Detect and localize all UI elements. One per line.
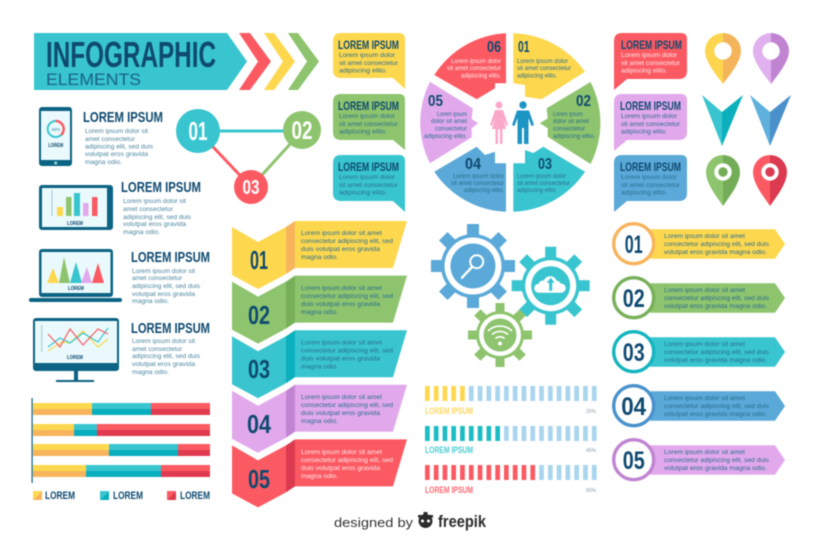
progress bar: red 65%: LOREM IPSUM — [425, 485, 473, 495]
speech bubble: blue — [614, 155, 687, 212]
ribbon step 04: duis volutpat eros gravida — [301, 411, 381, 417]
wheel segment 02: consectetur — [553, 126, 585, 132]
numbered arrow 02: 02 — [623, 285, 645, 313]
wheel segment 05: adipiscing elito. — [424, 134, 467, 140]
monitor block — [33, 318, 210, 382]
numbered arrow 04: consectetur adipiscing elit, sed duis — [664, 404, 769, 410]
speech bubble: teal — [333, 155, 405, 212]
laptop block — [29, 249, 210, 305]
speech bubble: green: Lorem ipsum dolor — [339, 114, 395, 120]
monitor body text: Lorem ipsum dolor sit — [132, 339, 195, 345]
speech bubble: red: Lorem ipsum dolor — [621, 53, 677, 59]
wheel segment 01: Lorem ipsum dolor — [517, 59, 568, 65]
speech bubble: yellow: adipiscing elito. — [339, 68, 387, 74]
icon: red map pin — [753, 155, 787, 206]
speech bubble: purple: adipiscing elito. — [621, 130, 667, 136]
ribbon step 04: magna odio. — [301, 419, 338, 425]
title banner — [34, 33, 247, 90]
speech bubble: teal: adipiscing elito. — [339, 190, 387, 196]
chart legend: LOREM — [45, 490, 75, 502]
triangle connected nodes: 03 — [242, 177, 260, 199]
wheel segment 06 — [434, 33, 506, 99]
tablet body text — [123, 199, 191, 236]
ribbon step 03: duis volutpat eros gravida — [301, 356, 381, 362]
numbered arrow 04: Lorem ipsum dolor sit amet — [664, 396, 745, 402]
chart legend — [33, 490, 210, 502]
speech bubble: yellow — [333, 33, 405, 89]
icon: tablet with bar chart: LOREM — [67, 221, 83, 227]
chart legend: LOREM — [113, 490, 143, 502]
numbered arrow 03: volutpat eros gravida magna odio. — [664, 358, 767, 364]
icon: monitor with line chart — [33, 318, 119, 382]
freepik wordmark: freepik — [438, 512, 486, 531]
wheel segment 06: 06 — [487, 39, 501, 56]
speech bubble: red — [614, 33, 687, 90]
speech bubble: red: sit amet consectetur — [621, 61, 680, 67]
wheel segment 01: adipiscing elito. — [517, 74, 557, 80]
wheel segment 06: Lorem ipsum dolor — [451, 59, 501, 65]
wheel segment 04: Lorem ipsum dolor — [453, 174, 504, 180]
wheel segment 04: 04 — [465, 156, 481, 173]
tablet body text: Lorem ipsum dolor sit — [123, 199, 186, 205]
tablet body text: magna odio. — [123, 230, 160, 236]
icon: blue arrow marker — [750, 95, 791, 146]
monitor heading: LOREM IPSUM — [131, 320, 210, 337]
icon: green map pin — [706, 155, 740, 206]
wheel segment 02: Lorem ipsum — [553, 112, 583, 118]
numbered arrow 05: volutpat eros gravida magna odio. — [664, 466, 767, 472]
numbered arrow 02: consectetur adipiscing elit, sed duis — [664, 296, 769, 302]
wheel segment 05: consectetur — [435, 126, 467, 132]
ribbon step 04 — [232, 385, 407, 453]
ribbon step 01: magna odio. — [301, 255, 338, 261]
icon: phone — [39, 107, 72, 166]
numbered arrow 05: 05 — [623, 447, 645, 475]
ribbon step 03: magna odio. — [301, 364, 338, 370]
ribbon step 01 — [232, 221, 407, 289]
icon: woman — [490, 102, 508, 144]
wheel segment 06: adipiscing elito. — [461, 74, 501, 80]
wheel segment 03: adipiscing elito. — [517, 188, 557, 194]
numbered arrow 02 — [614, 278, 785, 318]
numbered arrow 03: 03 — [623, 339, 645, 367]
tablet body text: amet consectetur — [123, 207, 173, 213]
ribbon step 01: 01 — [250, 245, 268, 275]
laptop body text: adipiscing elit, sed duis — [132, 284, 200, 290]
icon: tablet with bar chart — [39, 185, 113, 230]
wheel segment 01: sit amet consectetur — [517, 66, 571, 72]
icon: laptop with triangle chart: LOREM — [68, 286, 84, 292]
wheel segment 04: sit amet consectetur — [451, 181, 504, 187]
speech bubble: blue: LOREM IPSUM — [620, 160, 681, 174]
progress bar: teal 45%: 45% — [586, 448, 597, 454]
wheel segment 03: 03 — [538, 156, 552, 173]
wheel segment 06: sit amet consectetur — [447, 66, 501, 72]
wheel segment 02: adipiscing elito. — [553, 134, 595, 140]
speech bubble: purple: Lorem ipsum dolor — [621, 114, 677, 120]
ribbon step 01: Lorem ipsum dolor sit amet — [301, 231, 382, 237]
wheel segment 04: adipiscing elito. — [464, 188, 504, 194]
stacked bar chart — [32, 398, 210, 483]
speech bubble: blue: adipiscing elito. — [621, 190, 667, 196]
progress bar: red 65% — [425, 465, 597, 495]
wheel segment 02: 02 — [576, 93, 591, 110]
phone block — [39, 107, 163, 166]
speech bubble: purple: LOREM IPSUM — [620, 99, 681, 113]
icon: yellow map pin — [705, 33, 741, 84]
wheel segment 02 — [540, 82, 600, 164]
tablet body text: volutpat eros gravida — [123, 222, 187, 228]
numbered arrow 01: consectetur adipiscing elit, sed duis — [664, 242, 769, 248]
phone body text: adipiscing elit, sed duis — [85, 144, 153, 150]
speech bubble: yellow: LOREM IPSUM — [338, 38, 399, 52]
title text: INFOGRAPHIC — [46, 34, 216, 75]
ribbon step 02: Lorem ipsum dolor sit amet — [301, 286, 382, 292]
tablet block — [39, 179, 201, 236]
title chevrons — [239, 33, 319, 90]
icon: laptop with triangle chart — [29, 249, 122, 302]
speech bubble: blue: sit amet consectetur — [621, 183, 680, 189]
ribbon step 02: magna odio. — [301, 310, 338, 316]
numbered arrow 02: Lorem ipsum dolor sit amet — [664, 288, 745, 294]
ribbon step 01: duis volutpat eros gravida — [301, 247, 381, 253]
ribbon step 02: duis volutpat eros gravida — [301, 302, 381, 308]
ribbon step 05: duis volutpat eros gravida — [301, 466, 381, 472]
monitor body text: adipiscing elit, sed duis — [132, 354, 200, 360]
speech bubble: red: adipiscing elito. — [621, 68, 667, 74]
monitor body text: magna odio. — [132, 370, 169, 376]
laptop body text: amet consectetur — [132, 276, 182, 282]
laptop heading: LOREM IPSUM — [131, 249, 210, 266]
wheel segment 03: sit amet consectetur — [517, 181, 570, 187]
monitor body text: amet consectetur — [132, 347, 182, 353]
speech bubble: blue: Lorem ipsum dolor — [621, 175, 677, 181]
tablet heading: LOREM IPSUM — [121, 179, 201, 196]
phone body text: amet consectetur — [85, 137, 135, 143]
footer credit: designed by — [334, 515, 414, 530]
triangle connected nodes — [176, 109, 321, 204]
wheel segment 01 — [513, 33, 585, 99]
ribbon step 05: consectetur adipiscing elit, sed — [301, 458, 393, 464]
ribbon step 01: consectetur adipiscing elit, sed — [301, 239, 393, 245]
phone body text: volutpat eros gravida — [85, 152, 149, 158]
ribbon step 05: Lorem ipsum dolor sit amet — [301, 450, 382, 456]
wheel segment 02: dolor sit amet — [553, 119, 589, 125]
progress bar: teal 45%: LOREM IPSUM — [425, 445, 473, 455]
numbered arrow 05: consectetur adipiscing elit, sed duis — [664, 458, 769, 464]
progress bar: red 65%: 65% — [586, 488, 597, 494]
numbered arrow 05: Lorem ipsum dolor sit amet — [664, 450, 745, 456]
segmented pie wheel — [420, 33, 600, 212]
icon: purple map pin — [753, 33, 789, 84]
footer credit — [334, 512, 486, 531]
wheel segment 03: Lorem ipsum dolor — [517, 174, 566, 180]
numbered arrow 02: volutpat eros gravida magna odio. — [664, 304, 767, 310]
chart legend: LOREM — [180, 490, 210, 502]
ribbon step 02 — [232, 276, 407, 344]
wheel segment 01: 01 — [518, 39, 530, 56]
ribbon step 05: 05 — [248, 464, 270, 494]
progress bar: yellow 25%: 25% — [586, 409, 597, 415]
monitor body text — [132, 339, 200, 376]
progress bar: yellow 25% — [425, 386, 597, 416]
icon: teal arrow marker — [702, 95, 743, 146]
ribbon step 04: consectetur adipiscing elit, sed — [301, 403, 393, 409]
ribbon step 03: consectetur adipiscing elit, sed — [301, 348, 393, 354]
numbered arrow 04: volutpat eros gravida magna odio. — [664, 412, 767, 418]
tablet body text: adipiscing elit, sed duis — [123, 215, 191, 221]
triangle connected nodes: 02 — [292, 117, 312, 145]
subtitle text: ELEMENTS — [46, 71, 141, 89]
phone heading: LOREM IPSUM — [83, 109, 163, 126]
speech bubble: green: adipiscing elito. — [339, 130, 387, 136]
speech bubble: yellow: sit amet consectetur — [339, 61, 398, 67]
numbered arrow 01: 01 — [625, 231, 643, 259]
speech bubble: teal: sit amet consectetur — [339, 183, 398, 189]
speech bubble: yellow: Lorem ipsum dolor — [339, 53, 395, 59]
wheel segment 05: 05 — [428, 93, 443, 110]
ribbon step 03 — [232, 330, 407, 398]
icon: man — [512, 101, 534, 144]
numbered arrow 01: volutpat eros gravida magna odio. — [664, 250, 767, 256]
phone body text — [85, 129, 153, 166]
ribbon step 03: Lorem ipsum dolor sit amet — [301, 340, 382, 346]
ribbon step 04: 04 — [247, 409, 271, 439]
laptop body text: volutpat eros gravida — [132, 292, 196, 298]
numbered arrow 03: consectetur adipiscing elit, sed duis — [664, 350, 769, 356]
laptop body text: Lorem ipsum dolor sit — [132, 269, 195, 275]
wheel segment 05 — [420, 82, 478, 163]
laptop body text: magna odio. — [132, 299, 169, 305]
speech bubble: green: sit amet consectetur — [339, 122, 398, 128]
ribbon step 02: 02 — [248, 300, 270, 330]
numbered arrow 01: Lorem ipsum dolor sit amet — [664, 234, 745, 240]
wheel segment 03 — [513, 147, 585, 212]
speech bubble: teal: Lorem ipsum dolor — [339, 175, 395, 181]
icon: blue gear with magnifier — [431, 224, 515, 308]
ribbon step 05 — [232, 439, 407, 507]
icon: phone: 48% — [51, 127, 60, 132]
icon: green gear with wifi — [468, 303, 532, 367]
numbered arrow 01 — [614, 224, 785, 264]
ribbon step 04: Lorem ipsum dolor sit amet — [301, 395, 382, 401]
icon: teal gear with cloud — [512, 247, 590, 325]
phone body text: Lorem ipsum dolor sit — [85, 129, 148, 135]
numbered arrow 04: 04 — [621, 393, 646, 421]
phone body text: magna odio. — [85, 160, 122, 166]
laptop body text — [132, 269, 200, 305]
ribbon step 05: magna odio. — [301, 474, 338, 480]
numbered arrow 05 — [614, 440, 785, 480]
icon: freepik logo — [418, 512, 433, 528]
progress bar: yellow 25%: LOREM IPSUM — [425, 406, 473, 416]
speech bubble: teal: LOREM IPSUM — [338, 160, 399, 174]
speech bubble: purple — [614, 94, 687, 151]
numbered arrow 03 — [614, 332, 785, 372]
speech bubble: purple: sit amet consectetur — [621, 122, 680, 128]
icon: phone: LOREM — [48, 143, 64, 149]
monitor body text: volutpat eros gravida — [132, 362, 196, 368]
progress bar: teal 45% — [425, 426, 597, 455]
speech bubble: green: LOREM IPSUM — [338, 99, 399, 113]
numbered arrow 03: Lorem ipsum dolor sit amet — [664, 342, 745, 348]
wheel segment 05: Lorem ipsum — [437, 112, 467, 118]
ribbon step 03: 03 — [248, 354, 270, 384]
speech bubble: green — [333, 94, 405, 150]
wheel segment 05: dolor sit amet — [431, 119, 467, 125]
numbered arrow 04 — [614, 386, 785, 426]
speech bubble: red: LOREM IPSUM — [621, 38, 682, 52]
wheel segment 04 — [434, 147, 506, 212]
triangle connected nodes: 01 — [188, 116, 208, 146]
icon: monitor with line chart: LOREM — [67, 355, 83, 361]
ribbon step 02: consectetur adipiscing elit, sed — [301, 294, 393, 300]
